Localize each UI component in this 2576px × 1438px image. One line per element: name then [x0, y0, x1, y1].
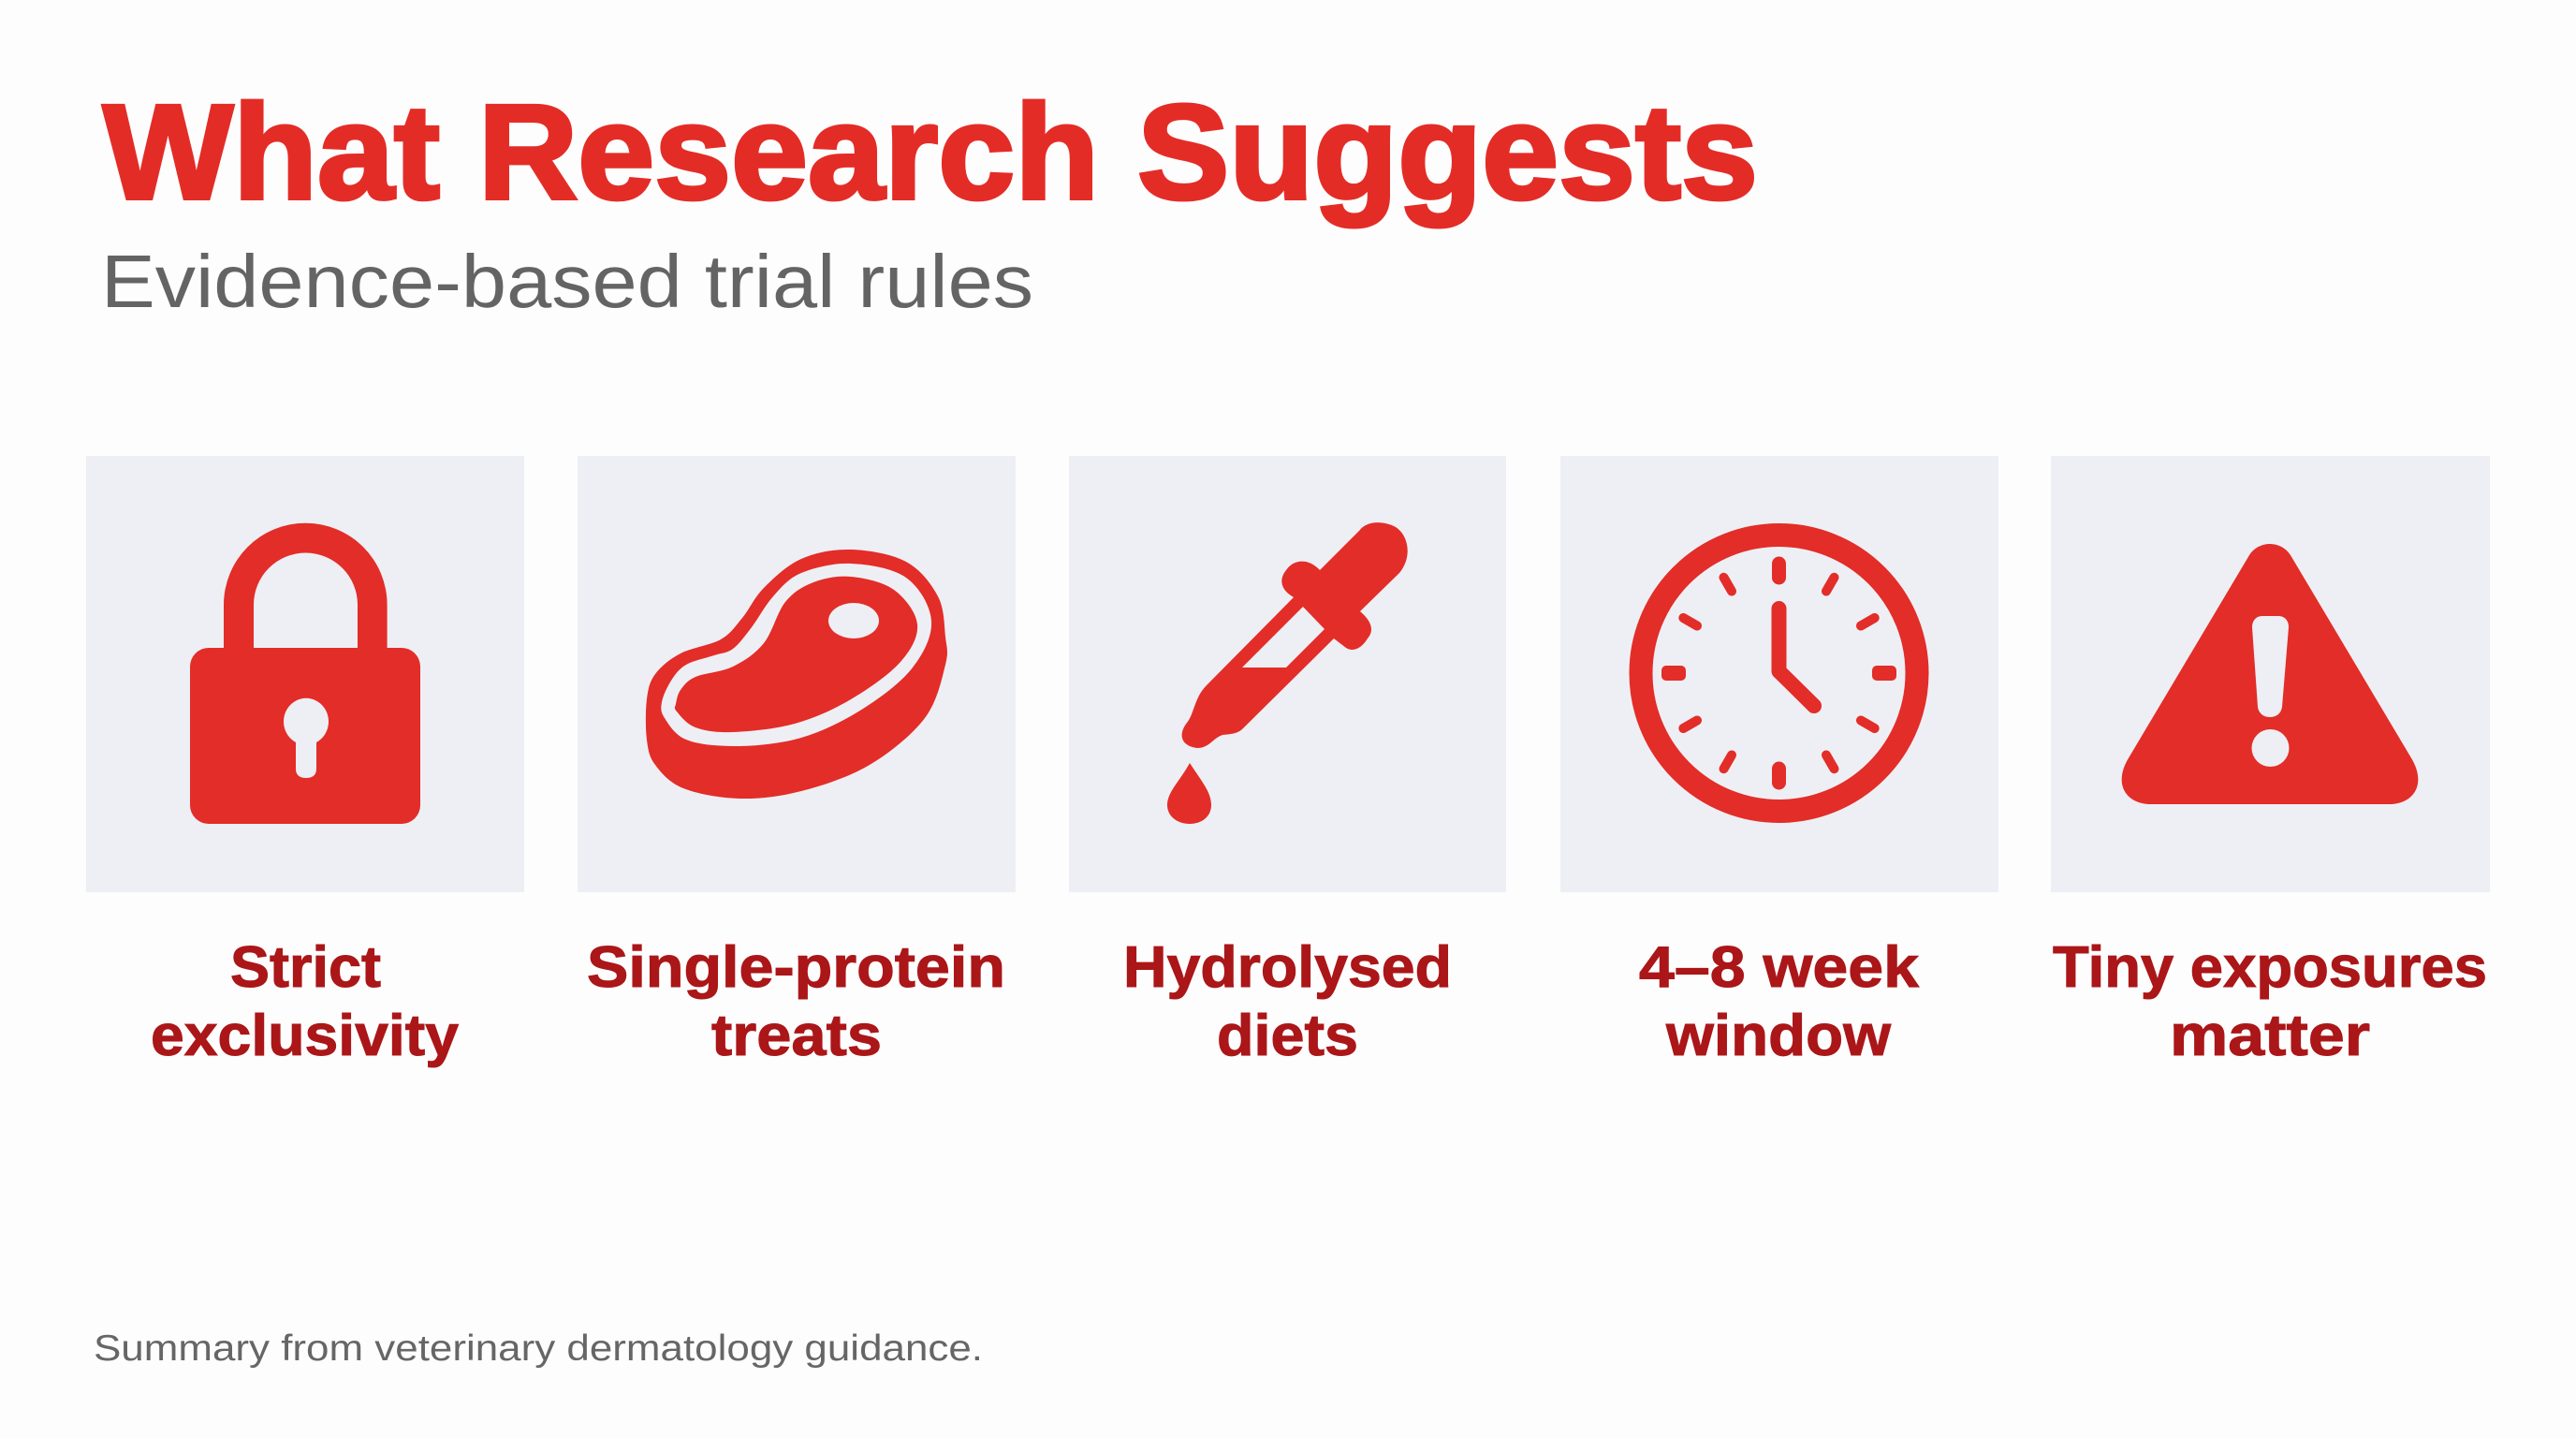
footer source note: Summary from veterinary dermatology guidance.	[94, 1328, 983, 1369]
card background	[2051, 456, 2490, 892]
icon: dropper with drop	[1167, 522, 1408, 824]
icon: meat steak	[646, 550, 947, 799]
label	[587, 935, 1005, 1068]
label: Tiny exposures	[2053, 935, 2487, 1000]
label: Single-protein	[587, 935, 1005, 1000]
label	[151, 935, 460, 1068]
icon: padlock	[190, 523, 420, 824]
card background	[578, 456, 1016, 892]
label	[2053, 935, 2487, 1068]
panel: strict exclusivity	[86, 456, 524, 1068]
label: treats	[711, 1004, 882, 1068]
label: matter	[2170, 1004, 2370, 1068]
label	[1123, 935, 1452, 1068]
card background	[86, 456, 524, 892]
subtitle: Evidence-based trial rules	[101, 240, 1033, 323]
label: window	[1665, 1004, 1892, 1068]
label: 4–8 week	[1639, 935, 1920, 1000]
panel: single-protein treats	[578, 456, 1016, 1068]
icon: warning triangle	[2122, 544, 2418, 804]
label	[1639, 935, 1920, 1068]
panel: tiny exposures matter	[2051, 456, 2490, 1068]
panel: hydrolysed diets	[1069, 456, 1506, 1068]
title: What Research Suggests	[103, 77, 1758, 227]
label: exclusivity	[151, 1004, 460, 1068]
label: Hydrolysed	[1123, 935, 1452, 1000]
card background	[1560, 456, 1998, 892]
card background	[1069, 456, 1506, 892]
icon: clock	[1641, 536, 1917, 811]
label: diets	[1217, 1004, 1358, 1068]
label: Strict	[230, 935, 381, 1000]
panel: 4-8 week window	[1560, 456, 1998, 1068]
